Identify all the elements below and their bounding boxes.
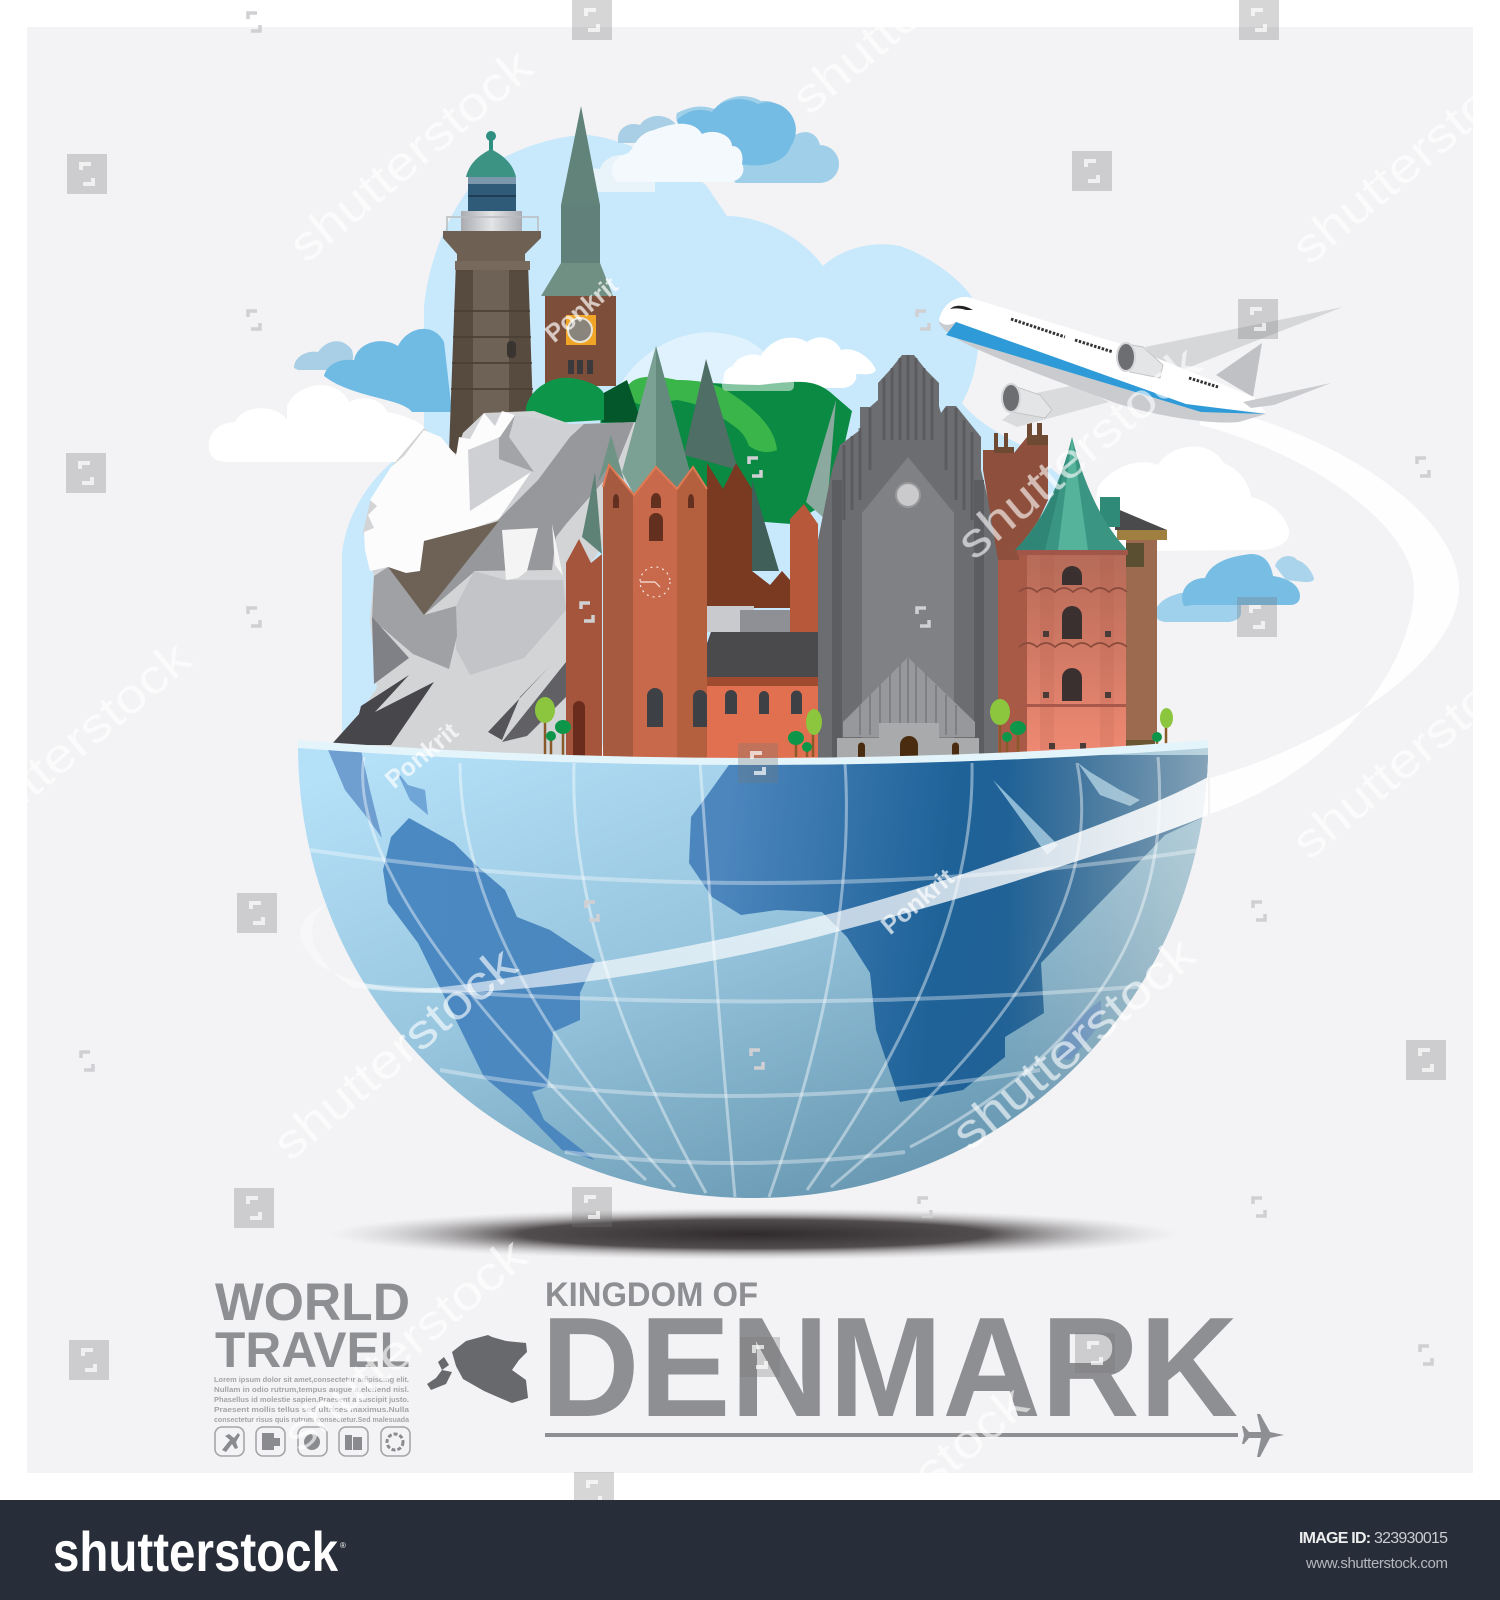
annex wall <box>695 680 818 760</box>
landmark: spire town hall tower <box>541 106 616 386</box>
dark green crowns <box>546 720 1162 752</box>
main tower <box>603 465 707 760</box>
spire body <box>561 205 600 263</box>
icon: globe <box>387 1434 403 1450</box>
small square vents <box>1043 631 1111 749</box>
belfry windows <box>568 360 593 374</box>
heading: kingdom of: KINGDOM OF <box>545 1276 758 1314</box>
africa <box>689 755 1208 1102</box>
pale small puff <box>1275 556 1314 582</box>
main green hill <box>600 381 852 524</box>
left shade <box>1019 552 1027 758</box>
heading: denmark: DENMARK <box>541 1288 1238 1447</box>
right tower spire <box>806 400 836 520</box>
main tower left shade <box>603 465 633 760</box>
icon: luggage <box>345 1435 362 1450</box>
footer url: www.shutterstock.com <box>1305 1555 1448 1572</box>
wall <box>1126 540 1157 740</box>
pale back lobe <box>1155 593 1241 622</box>
porch ribs <box>860 658 956 735</box>
cloud: right blue <box>1155 554 1314 622</box>
contrail across globe <box>300 777 1208 993</box>
dark roof <box>1115 508 1167 530</box>
dome <box>466 149 516 177</box>
white cloud body <box>612 124 743 182</box>
south america <box>383 818 595 1160</box>
watermarks: ponkrit: Ponkrit <box>876 863 960 940</box>
rock base <box>331 411 641 762</box>
contrail upper band <box>1200 404 1459 814</box>
porch gable <box>843 657 975 737</box>
lantern room <box>468 177 516 212</box>
clock face <box>568 318 592 342</box>
watermarks: ponkrit <box>380 271 960 940</box>
globe <box>298 740 1208 1200</box>
cloud: top white <box>574 124 743 192</box>
jutland shape <box>452 1335 528 1403</box>
icon: badge <box>304 1434 320 1450</box>
sky backdrop shape <box>342 135 1155 745</box>
spire needle <box>561 106 600 205</box>
travel: TRAVEL <box>215 1322 410 1378</box>
light cloud puff <box>618 116 688 143</box>
tower body <box>449 262 533 456</box>
ground shadow <box>329 1208 1179 1260</box>
denmark map silhouette <box>427 1335 528 1403</box>
tower windows <box>647 688 707 727</box>
castle low wing <box>998 560 1019 760</box>
blue cloud body <box>676 96 839 183</box>
trees <box>535 697 1173 757</box>
lorem text block: Nullam in odio rutrum,tempus augue a,eleifend nisl. <box>214 1385 409 1394</box>
side shades <box>832 480 984 760</box>
low ledge green <box>548 470 608 513</box>
world: WORLD <box>215 1273 410 1332</box>
grey roof bits <box>707 606 754 632</box>
translucent cloud base <box>574 155 655 192</box>
small spire <box>598 435 624 482</box>
watermarks: shutterstock: shutterstock <box>279 39 544 273</box>
left tower door <box>573 701 585 760</box>
persian gulf <box>1078 763 1140 806</box>
fuselage top <box>939 297 1266 413</box>
left side dark <box>372 617 409 684</box>
clock plate <box>566 315 596 345</box>
tail elevator <box>1243 383 1331 408</box>
gable outline <box>603 465 707 495</box>
dark green patch <box>602 380 642 424</box>
round window <box>896 483 920 507</box>
window <box>507 341 516 358</box>
fuselage belly <box>939 322 1266 423</box>
main spire <box>622 346 656 495</box>
airplane <box>939 297 1343 427</box>
railing <box>447 217 538 231</box>
snow cap <box>364 411 531 573</box>
globe edge sheen <box>1028 748 1208 1096</box>
heading: world travel <box>215 1273 410 1378</box>
windows <box>1062 566 1082 701</box>
footer image id: IMAGE ID: 323930015 <box>1299 1530 1448 1547</box>
silver platform <box>461 211 522 232</box>
icon: plane <box>222 1433 240 1452</box>
small rear roof <box>1100 497 1120 527</box>
upper dark panel <box>1126 543 1144 567</box>
mid grey slope <box>424 422 634 615</box>
landmark: lighthouse <box>443 131 541 456</box>
right tower <box>790 504 818 632</box>
deeper blue lobe <box>677 99 796 165</box>
watermarks: shutterstock: shutterstock <box>947 336 1212 570</box>
drum <box>1019 552 1126 758</box>
left spire <box>582 472 602 554</box>
tower band <box>455 261 530 270</box>
dome finial <box>486 131 496 141</box>
landmark: brown wing <box>1115 508 1167 754</box>
back low section <box>752 571 790 608</box>
globe rim <box>298 740 1208 765</box>
flight line <box>545 1433 1238 1437</box>
porch <box>837 723 979 760</box>
tail fin <box>1216 343 1262 397</box>
annex windows <box>725 690 802 714</box>
brown earth <box>388 521 499 615</box>
arch friezes <box>1019 588 1127 647</box>
cornice <box>1117 530 1167 540</box>
blue cloud <box>324 329 452 412</box>
blue stripe <box>946 322 1266 414</box>
church silhouette <box>818 355 998 760</box>
conical roof <box>1015 437 1127 550</box>
north america strip <box>328 750 382 838</box>
cockpit window <box>950 306 973 310</box>
footer logo: shutterstock <box>53 1520 339 1583</box>
annex roof <box>695 632 818 677</box>
icon: small plane on line <box>1242 1414 1284 1457</box>
madagascar <box>1056 1000 1101 1060</box>
side doors <box>858 743 959 760</box>
back tower <box>707 463 752 608</box>
lorem text block: Phasellus id molestie sapien.Praesent a suscipit justo. <box>214 1395 409 1404</box>
watermarks: shutterstock: shutterstock <box>273 1228 538 1462</box>
front plane <box>862 457 954 760</box>
globe sphere <box>298 745 1208 1198</box>
upper engine <box>1126 344 1163 378</box>
lighter rock panel <box>456 571 566 675</box>
landmark: back brick castle <box>983 423 1048 760</box>
central america bits <box>396 770 428 815</box>
lorem text block: Lorem ipsum dolor sit amet,consectetur adipiscing elit. <box>214 1375 409 1384</box>
blue body <box>1182 554 1300 606</box>
cloud: white over hill <box>723 337 876 388</box>
dark strata left <box>331 675 434 745</box>
gallery flare <box>443 231 541 261</box>
travel icons row <box>215 1427 410 1456</box>
landmark: grey church <box>818 355 998 760</box>
icon: passport and camera <box>262 1433 280 1450</box>
upper shadow facet <box>499 415 534 472</box>
watermarks: shutterstock: shutterstock <box>942 927 1207 1161</box>
brick shaft <box>545 296 616 386</box>
cloud: top blue <box>618 96 839 183</box>
landmark: brick cathedral <box>566 346 836 760</box>
light upper rock <box>468 413 584 519</box>
vertical ribs <box>844 355 972 520</box>
light green crowns <box>535 697 1173 735</box>
castle wall <box>983 437 1048 560</box>
watermarks: shutterstock: shutterstock <box>263 937 528 1171</box>
footer bar <box>0 1500 1500 1600</box>
main door <box>900 736 918 760</box>
spire flare roof <box>541 263 613 296</box>
back tall spire <box>684 359 738 470</box>
footer registered mark: ® <box>340 1541 346 1550</box>
cloud: pale arc behind hill <box>616 332 770 392</box>
lorem text block <box>214 1375 410 1424</box>
red sea wedge <box>993 780 1058 855</box>
cloud: left blue <box>294 329 452 412</box>
meridians <box>363 757 1160 1197</box>
green hill <box>526 377 852 524</box>
back dark spire <box>752 480 779 571</box>
landmark: rock cliff <box>331 411 641 762</box>
dark base <box>1126 740 1155 754</box>
tree trunks <box>545 715 1166 757</box>
cloud: left white <box>209 385 429 462</box>
watermarks: ponkrit: Ponkrit <box>380 717 464 794</box>
castle turrets <box>994 423 1048 453</box>
dark strata right <box>488 667 549 740</box>
drum vertical shades <box>1040 552 1054 758</box>
icon frames <box>215 1427 410 1456</box>
front bush <box>526 378 604 424</box>
watermarks: ponkrit: Ponkrit <box>540 271 624 348</box>
eave <box>1017 550 1128 555</box>
small pale puff <box>294 341 353 370</box>
tower ring lines <box>451 311 533 389</box>
lower wing <box>1002 385 1109 427</box>
belt course <box>1019 704 1126 707</box>
tower lighter centre <box>473 262 509 425</box>
bright green patches <box>627 377 777 452</box>
latitudes <box>310 850 1200 1163</box>
lower engine <box>1011 385 1052 418</box>
lorem text block: Praesent mollis tellus sed ultrices maximus.Nulla <box>214 1405 410 1414</box>
islands <box>427 1357 452 1390</box>
left tower <box>566 539 602 760</box>
translucent cloud strip over hill <box>722 378 794 391</box>
upper wing <box>1145 307 1343 375</box>
cloud: right white behind towers <box>1079 447 1289 611</box>
window rows <box>1011 319 1218 387</box>
white fissure <box>502 528 538 580</box>
clock <box>640 567 670 597</box>
lower left grey <box>372 567 457 669</box>
lorem text block: consectetur risus quis rutrum consectetur.Sed malesuada <box>214 1415 410 1424</box>
main tower right shade <box>677 467 707 760</box>
landmark: teal round tower <box>1015 437 1128 758</box>
